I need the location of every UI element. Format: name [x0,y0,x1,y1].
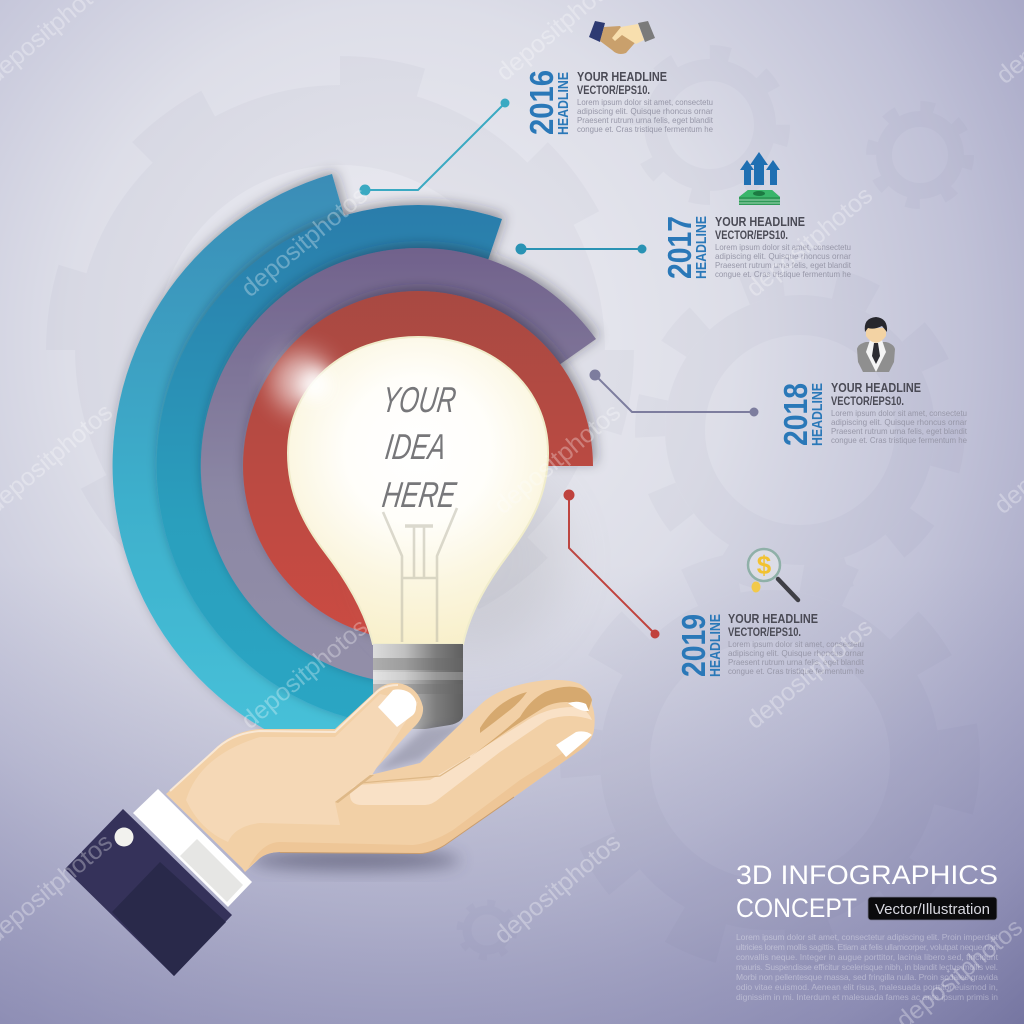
block 2017: Lorem ipsum dolor sit amet, consectetu [715,242,851,252]
connector 2019 [564,490,658,638]
block 2019: VECTOR/EPS10. [728,625,801,639]
palm crease [360,757,470,783]
block 2018: congue et. Cras tristique fermentum he [831,435,967,445]
icon: magnifier with dollar: $ [757,550,772,580]
block 2017 [661,214,852,279]
block 2017: Praesent rutrum urna felis, eget blandit [715,260,852,270]
block 2019: YOUR HEADLINE [728,611,818,626]
watermarks: depositphotos [741,181,878,303]
sleeve button [114,828,134,846]
light bulb [272,337,565,729]
year 2018: 2018 [777,383,814,446]
block 2016: Praesent rutrum urna felis, eget blandit [577,115,714,125]
connector 2016 [360,100,508,194]
watermarks: depositphotos [489,398,626,520]
filament [383,508,457,642]
block 2019: Praesent rutrum urna felis, eget blandit [728,657,865,667]
ring 2016 [108,166,354,729]
background gears [68,53,968,957]
hand with cuff [65,680,595,976]
block 2018: Lorem ipsum dolor sit amet, consectetu [831,408,967,418]
block 2018: adipiscing elit. Quisque rhoncus ornar [831,417,967,427]
bulb screw base [373,644,463,729]
main title: 3D INFOGRAPHICS [736,860,998,890]
jacket sleeve [65,809,232,976]
year 2017: 2017 [661,216,698,279]
block 2017: VECTOR/EPS10. [715,228,788,242]
watermarks: depositphotos [236,181,373,303]
block 2017: congue et. Cras tristique fermentum he [715,269,851,279]
block 2019: HEADLINE [707,614,724,677]
shirt cuff [133,789,252,907]
watermarks: depositphotos [236,613,373,735]
icon: handshake [589,21,655,54]
connector 2017 [516,244,646,254]
block 2018: HEADLINE [809,383,826,446]
block 2016: HEADLINE [555,72,572,135]
year 2016: 2016 [523,70,560,135]
block 2019: Lorem ipsum dolor sit amet, consectetu [728,639,864,649]
body paragraph: Lorem ipsum dolor sit amet, consectetur adipiscing elit. Proin imperdiet [736,932,999,942]
main title: CONCEPT [736,893,857,923]
rear finger nail [568,702,589,711]
icon: magnifier with dollar [748,549,798,600]
idea text: YOUR [380,379,459,420]
body paragraph: mauris. Suspendisse efficitur scelerisque nibh, in blandit lectus mollis vel. [736,962,998,972]
block 2018: YOUR HEADLINE [831,380,921,395]
idea text [380,379,459,515]
block 2016: Lorem ipsum dolor sit amet, consectetu [577,97,713,107]
hand [166,680,595,872]
palm edge line [280,797,514,854]
block 2016: congue et. Cras tristique fermentum he [577,124,713,134]
body paragraph: dignissim in mi. Interdum et malesuada fames ac ante ipsum primis in [736,992,998,1002]
year 2019: 2019 [675,614,712,677]
bulb glass [288,337,548,644]
block 2019: adipiscing elit. Quisque rhoncus ornar [728,648,864,658]
block 2017: adipiscing elit. Quisque rhoncus ornar [715,251,851,261]
ring 2017 [157,205,502,727]
finger gaps [480,692,527,733]
main title [736,860,998,923]
body paragraph: Morbi non pellentesque massa, sed fringilla nulla. Proin sodales gravida [736,972,998,982]
block 2017: HEADLINE [693,216,710,279]
vector illustration badge [868,897,997,920]
top rim highlight [170,685,398,791]
block 2016: adipiscing elit. Quisque rhoncus ornar [577,106,713,116]
upper palm and thumb [186,694,418,842]
block 2016: YOUR HEADLINE [577,69,667,84]
ring 2019 [243,291,593,641]
icon: arrows and money [739,152,780,205]
idea text: IDEA [383,426,449,467]
body paragraph: odio vitae euismod. Aenean elit risus, malesuada porttitor euismod in, [736,982,998,992]
ring 2018 [201,248,596,684]
body paragraph: ultricies lorem mollis sagittis. Etiam at felis ullamcorper, volutpat neque non [736,942,998,952]
body paragraph [736,932,999,1002]
thumb nail [378,689,416,727]
block 2019 [675,611,865,677]
watermarks: depositphotos [741,613,878,735]
thumb crease [335,775,374,803]
block 2018: Praesent rutrum urna felis, eget blandit [831,426,968,436]
icon: businessman [857,317,895,372]
lower palm band [248,735,591,868]
connector 2018 [590,370,758,416]
block 2018 [777,380,968,446]
lighter palm and finger band [350,707,592,805]
front finger nail [556,731,592,757]
block 2017: YOUR HEADLINE [715,214,805,229]
body paragraph: convallis neque. Integer in augue porttitor, lacinia libero sed, tincidunt [736,952,999,962]
block 2016: VECTOR/EPS10. [577,83,650,97]
block 2019: congue et. Cras tristique fermentum he [728,666,864,676]
vector illustration badge: Vector/Illustration [875,901,990,918]
ring chart [113,174,596,770]
watermarks: depositphotos [489,828,626,950]
block 2016 [523,69,714,135]
block 2018: VECTOR/EPS10. [831,394,904,408]
idea text: HERE [380,474,459,515]
